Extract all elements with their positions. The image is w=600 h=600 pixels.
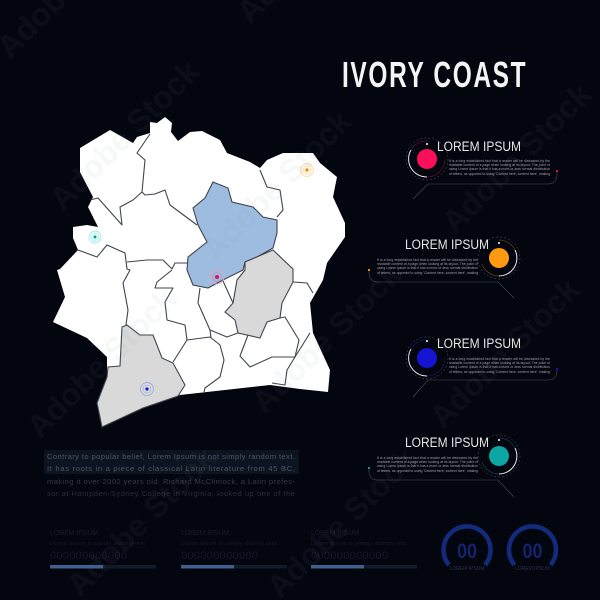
text block: It is a long established fact that a reader will be distracted by the	[377, 456, 478, 460]
stat block 2: Lorem Ipsum is simply dummy text	[181, 541, 276, 547]
stat block 2: LOREM IPSUM	[181, 530, 229, 537]
heading: LOREM IPSUM	[437, 336, 521, 351]
heading: LOREM IPSUM	[405, 435, 489, 450]
paragraph	[44, 450, 299, 498]
marker: pink	[210, 270, 224, 284]
gauge 2	[509, 526, 556, 572]
text block: of letters, as opposed to using 'Content here, content here', making	[377, 469, 478, 473]
text block: readable content of a page when looking at its layout. The point of	[377, 262, 478, 266]
text block: readable content of a page when looking at its layout. The point of	[377, 460, 478, 464]
leader line	[413, 370, 557, 397]
icon: orange dial	[478, 237, 520, 279]
text block	[449, 159, 550, 176]
text: Adobe Stock	[194, 103, 358, 267]
region: grey south-west	[97, 325, 185, 427]
paragraph: It has roots in a piece of classical Latin literature from 45 BC,	[47, 464, 295, 473]
marker: orange	[300, 164, 314, 176]
text block: It is a long established fact that a reader will be distracted by the	[377, 258, 478, 262]
stat block 1: 000000000000	[50, 550, 127, 562]
panel: callout blue	[406, 336, 558, 397]
stat block 2	[181, 530, 287, 568]
heading: LOREM IPSUM	[437, 139, 521, 154]
text: Adobe Stock	[422, 271, 586, 435]
paragraph: Contrary to popular belief, Lorem Ipsum is not simply random text.	[47, 452, 295, 461]
text block: using Lorem Ipsum is that it has a more-or-less normal distribution	[449, 167, 550, 171]
text: Adobe Stock	[42, 53, 206, 217]
gauge 2: 00	[522, 540, 542, 563]
stat block 3	[311, 530, 417, 568]
title: IVORY COAST	[342, 54, 526, 95]
stat block 1	[50, 530, 156, 568]
text block: readable content of a page when looking at its layout. The point of	[449, 361, 550, 365]
gauge 1	[444, 526, 491, 572]
text block	[377, 258, 478, 275]
heading: LOREM IPSUM	[405, 237, 489, 252]
panel: callout teal	[368, 435, 520, 497]
region: grey east	[225, 250, 293, 338]
gauge 1: 00	[457, 540, 477, 563]
icon: blue dial	[406, 337, 448, 379]
gauge 2: LOREM IPSUM	[515, 566, 550, 572]
stat block 3: LOREM IPSUM	[311, 530, 359, 537]
text block: using Lorem Ipsum is that it has a more-or-less normal distribution	[377, 266, 478, 270]
icon: pink dial	[406, 138, 448, 180]
text block: It is a long established fact that a reader will be distracted by the	[449, 357, 550, 361]
stat block 1: LOREM IPSUM	[50, 530, 98, 537]
region: blue	[187, 182, 277, 288]
text block: using Lorem Ipsum is that it has a more-or-less normal distribution	[449, 365, 550, 369]
stat block 3: 000000000000	[311, 550, 388, 562]
text: Adobe Stock	[434, 76, 598, 240]
leader line	[369, 469, 514, 497]
text block: It is a long established fact that a reader will be distracted by the	[449, 159, 550, 163]
country outline	[53, 117, 345, 427]
leader line	[413, 172, 557, 199]
text block	[449, 357, 550, 374]
text block	[377, 456, 478, 473]
paragraph: sor at Hampden-Sydney College in Virginia, looked up one of the	[47, 489, 295, 498]
icon: teal dial	[478, 435, 520, 477]
text block: of letters, as opposed to using 'Content here, content here', making	[449, 370, 550, 374]
paragraph: making it over 2000 years old. Richard McClintock, a Latin profes-	[47, 477, 295, 486]
text: Adobe Stock	[19, 281, 183, 445]
marker: teal	[89, 231, 101, 243]
leader line	[369, 271, 514, 298]
gauge 1: LOREM IPSUM	[449, 566, 485, 572]
panel: callout orange	[368, 237, 520, 298]
text: Adobe Stock	[59, 439, 223, 600]
text: Adobe Stock	[244, 256, 408, 420]
text block: using Lorem Ipsum is that it has a more-or-less normal distribution	[377, 464, 478, 468]
region borders	[78, 134, 313, 392]
stat block 2: 000000000000	[181, 550, 258, 562]
text block: readable content of a page when looking at its layout. The point of	[449, 163, 550, 167]
panel: callout pink	[406, 138, 558, 199]
stat block 1: Lorem Ipsum is simply dummy text	[50, 541, 145, 547]
stat block 3: Lorem Ipsum is simply dummy text	[311, 541, 406, 547]
marker: blue	[140, 382, 154, 396]
text block: of letters, as opposed to using 'Content here, content here', making	[377, 271, 478, 275]
text block: of letters, as opposed to using 'Content here, content here', making	[449, 172, 550, 176]
map of Ivory Coast	[53, 117, 345, 427]
